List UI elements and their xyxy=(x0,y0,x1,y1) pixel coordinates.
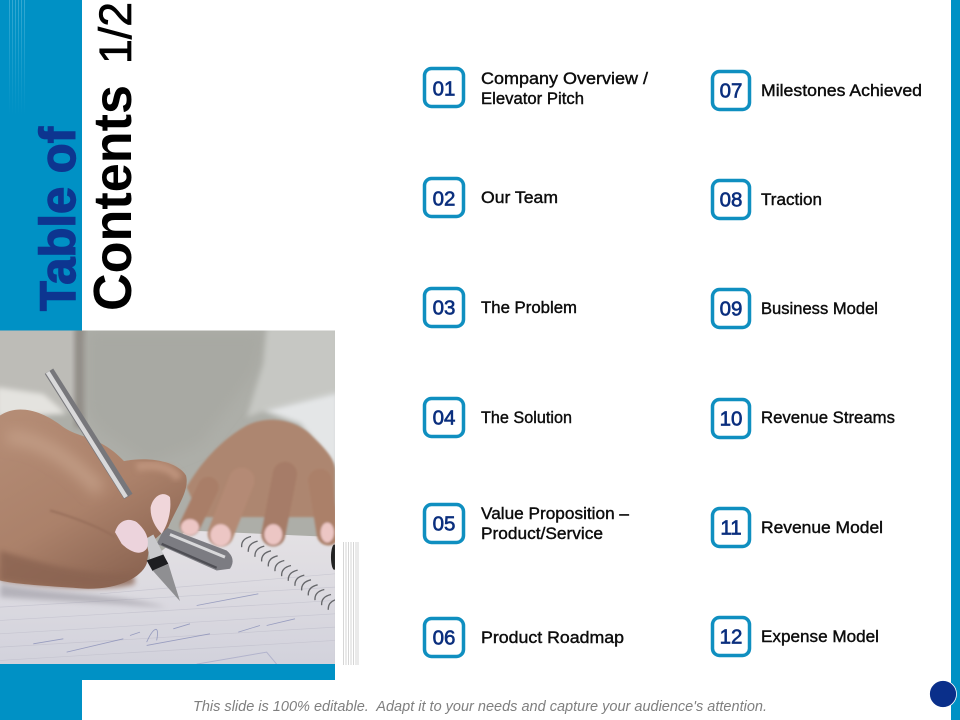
item 05: Product/Service xyxy=(481,525,603,543)
notebook page xyxy=(0,530,335,664)
pen cap xyxy=(157,527,233,570)
item 05 xyxy=(424,504,630,543)
title line: Contents: Contents xyxy=(83,85,143,311)
item 07 xyxy=(712,72,922,110)
item 12: 12 xyxy=(720,626,742,648)
item 09: Business Model xyxy=(761,300,878,318)
item 05: 05 xyxy=(433,512,455,536)
shadow under hand xyxy=(0,584,167,607)
item 11 xyxy=(712,508,883,546)
pen barrel xyxy=(48,371,128,497)
item 04: The Solution xyxy=(481,409,572,427)
item 04 xyxy=(424,398,572,436)
title line: Table of: Table of xyxy=(30,127,86,311)
item 08 xyxy=(712,180,822,218)
notebook spiral xyxy=(242,536,338,610)
photo: hand writing with a fountain pen in a notebook xyxy=(0,324,338,664)
item 11: Revenue Model xyxy=(761,519,883,537)
item 05: Value Proposition – xyxy=(481,505,630,523)
item 08: Traction xyxy=(761,191,822,209)
item 02 xyxy=(424,178,558,216)
item 07: Milestones Achieved xyxy=(761,82,922,100)
item 03 xyxy=(424,288,577,326)
decorative grey stripes xyxy=(344,542,358,665)
item 12: Expense Model xyxy=(761,628,879,646)
background hand xyxy=(181,420,335,546)
item 02: 02 xyxy=(433,188,455,210)
item 11: 11 xyxy=(720,516,742,540)
item 03: 03 xyxy=(433,296,455,320)
item 10: 10 xyxy=(720,408,742,430)
item 01 xyxy=(424,68,648,108)
item 03: The Problem xyxy=(481,299,577,317)
handwriting on the page xyxy=(33,594,295,652)
item 06 xyxy=(424,618,624,656)
item 09 xyxy=(712,290,878,328)
item 01: Company Overview / xyxy=(481,70,648,88)
title line: 1/2: 1/2 xyxy=(90,2,141,64)
fingernails xyxy=(115,520,148,553)
item 08: 08 xyxy=(720,188,742,212)
item 06: Product Roadmap xyxy=(481,629,624,647)
item 10 xyxy=(712,400,895,438)
item 04: 04 xyxy=(433,406,455,430)
title: Table of Contents 1/2 xyxy=(30,2,143,311)
item 12 xyxy=(712,618,879,656)
item 06: 06 xyxy=(433,626,455,650)
item 01: Elevator Pitch xyxy=(481,90,584,108)
writing hand xyxy=(0,410,187,589)
page marker circle xyxy=(930,680,956,708)
item 07: 07 xyxy=(720,80,742,102)
item 02: Our Team xyxy=(481,189,558,207)
item 01: 01 xyxy=(433,78,455,100)
black object at page edge xyxy=(330,544,335,570)
footer note: This slide is 100% editable. Adapt it to your needs and capture your audience's attention. xyxy=(193,699,767,715)
item 09: 09 xyxy=(720,298,742,320)
decorative stripes on blue band xyxy=(9,0,25,115)
right blue edge bar xyxy=(951,0,960,720)
blue strip under photo xyxy=(0,664,335,680)
panel: left blue band xyxy=(0,0,82,720)
item 10: Revenue Streams xyxy=(761,409,895,427)
